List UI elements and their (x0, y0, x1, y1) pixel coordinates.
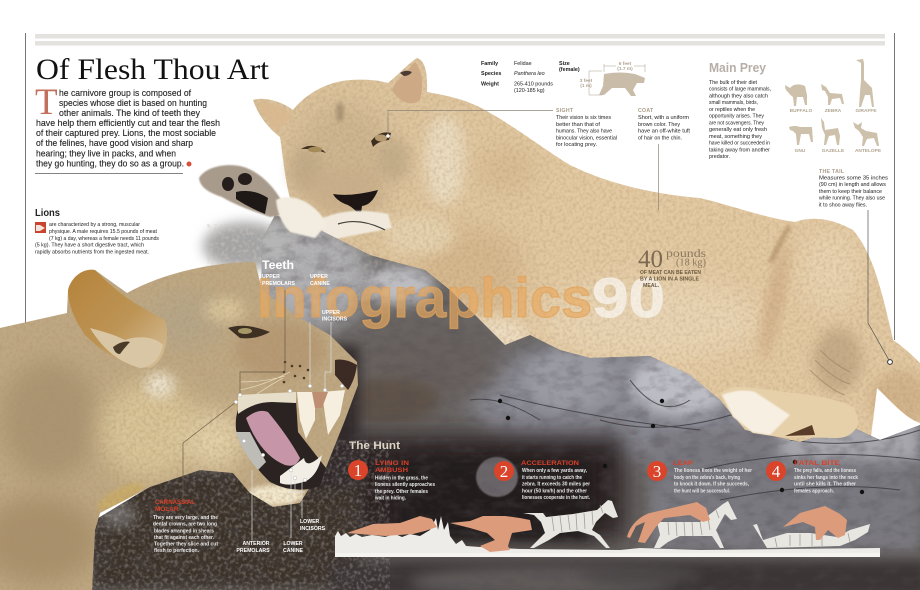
left paw of upper lioness (199, 165, 327, 238)
prey labels: GIRAFFE (855, 108, 877, 114)
hunt step 2: zebra. It exceeds 30 miles per (522, 482, 591, 488)
header bands and page rules (25, 33, 895, 340)
speckled rock fading behind paw (203, 222, 287, 270)
sight note: Their vision is six times (556, 115, 611, 121)
prey silhouettes (785, 59, 879, 146)
hunt step 3 (647, 460, 753, 494)
hunt illustration: fallen zebra and biting lioness (753, 506, 870, 548)
coat note: of hair on the chin. (638, 136, 682, 142)
hunt step 4: FATAL BITE (794, 460, 841, 467)
main prey text: are not scavengers. They (709, 120, 764, 126)
teeth labels: UPPER (262, 274, 280, 280)
coat note (638, 108, 691, 142)
front lioness photo (0, 260, 360, 590)
hunt illustration: zebra running (523, 500, 618, 548)
prey labels (790, 108, 882, 154)
fact table: (120-185 kg) (514, 88, 545, 94)
icon: gazelle (821, 118, 840, 145)
watermark: 90 (592, 266, 665, 329)
40 pounds statistic: pounds (666, 246, 706, 260)
fact table: Species (481, 71, 501, 77)
hunt step 1: Hidden in the grass, the (375, 476, 428, 482)
tooth labels lower: INCISORS (300, 526, 326, 532)
hunt illustration: lioness lying in ambush (347, 516, 437, 536)
main prey text: have killed or succeeded in (709, 141, 770, 147)
intro text block: other animals. The kind of teeth they (59, 108, 200, 119)
hunt step 2: ACCELERATION (521, 460, 579, 467)
main prey text (709, 60, 771, 160)
carnassial molar note: CARNASSIAL (155, 499, 195, 506)
fact table: 265-410 pounds (514, 82, 553, 88)
fact table: (female) (559, 67, 580, 73)
hunt illustration: lioness running (450, 516, 532, 552)
front lioness ear (68, 270, 167, 368)
carnassial molar note: that fit against each other. (154, 535, 214, 541)
hunt step 4: until she kills it. The other (794, 482, 857, 488)
size diagram: 3 feet (580, 78, 593, 84)
fact table: Panthera leo (514, 71, 545, 77)
hunt step 2: When only a few yards away, (522, 468, 587, 474)
fact table: Felidae (514, 61, 532, 67)
hunt step 1: wait in hiding. (374, 496, 406, 502)
coat note: COAT (638, 108, 654, 114)
sight note (556, 108, 617, 148)
main prey text: opportunity arises. They (709, 114, 764, 120)
sight note: binocular vision, essential (556, 136, 617, 142)
icon: buffalo (785, 84, 807, 106)
the hunt heading: The Hunt (349, 440, 400, 452)
teeth labels: CANINE (310, 281, 330, 287)
carnassial molar note: dental crowns, are two long (153, 522, 217, 528)
prey labels: ZEBRA (825, 108, 842, 114)
fact table: Family (481, 61, 498, 67)
tail note (818, 169, 888, 208)
main prey text: or reptiles when the (709, 107, 755, 113)
intro text block (35, 82, 220, 174)
lioness face features (258, 62, 422, 240)
40 pounds statistic: (18 kg) (676, 258, 706, 268)
hunt step 3: The lioness fixes the weight of her (674, 468, 753, 474)
teeth labels: UPPER (310, 274, 328, 280)
coat note: Short, with a uniform (638, 115, 690, 121)
Lions text block: Lions (35, 207, 60, 219)
hunt step 2 (494, 460, 591, 501)
main prey text: The bulk of their diet (709, 80, 757, 86)
hunt step 1: lioness silently approaches (375, 482, 435, 488)
intro text block: of the felines, have good vision and sharp (36, 138, 193, 149)
hunt step 3: to knock it down. If she succeeds, (674, 482, 749, 488)
sight and coat leader lines (386, 110, 892, 364)
icon: antelope (853, 122, 879, 146)
40 pounds statistic: BY A LION IN A SINGLE (640, 276, 700, 282)
40 pounds statistic: MEAL. (643, 283, 660, 289)
tail note: it to shoo away flies. (819, 202, 867, 208)
teeth labels (262, 260, 348, 322)
hunt illustration: zebra and leaping lioness (627, 501, 737, 548)
hunt step 3: LEAP (673, 460, 694, 467)
tooth labels lower: LOWER (283, 541, 303, 547)
hunt step 1 (348, 460, 435, 502)
sight note: humans. They also have (556, 128, 612, 134)
tail note: them to keep their balance (819, 189, 882, 195)
tail note: Measures some 35 inches (819, 176, 888, 182)
hunt step 2: it starts running to catch the (522, 475, 582, 481)
size diagram: (1 m) (580, 83, 592, 89)
main prey text: taking away from another (709, 147, 770, 153)
sight note: SIGHT (556, 108, 574, 114)
sight note: for locating prey. (556, 142, 597, 148)
hunt step 2: 2 (500, 462, 508, 481)
tail note: while running. They also use (818, 196, 885, 202)
prey labels: BUFFALO (790, 108, 813, 114)
prey labels: ANTELOPE (855, 148, 882, 154)
hunt step 1: AMBUSH (375, 467, 408, 474)
tooth labels lower: LOWER (300, 519, 320, 525)
upper lioness photo (250, 55, 920, 445)
icon: gnu (789, 126, 813, 145)
teeth labels: Teeth (262, 260, 294, 272)
Lions text block: (5 kg). They have a short digestive tract, which (35, 242, 144, 248)
Lions text block: are characterized by a strong, muscular (49, 222, 140, 228)
hunt step 1: 1 (354, 461, 362, 480)
Lions text block: rapidly absorbs nutrients from the ingested meat. (35, 250, 149, 256)
drop cap: T (35, 82, 58, 123)
intro text block: have help them efficiently cut and tear the flesh (36, 118, 220, 129)
size diagram: (1.7 m) (617, 66, 633, 72)
main prey text: consists of large mammals, (709, 87, 771, 93)
teeth labels: INCISORS (322, 316, 348, 322)
sight note: better than that of (556, 122, 601, 128)
intro text block: they go hunting, they do so as a group. (36, 158, 184, 170)
tooth labels lower (236, 519, 326, 554)
size diagram (580, 61, 645, 96)
fact table: Weight (481, 82, 499, 88)
hunt step 2: hour (50 km/h) and the other (522, 488, 588, 494)
hunt step 3: 3 (653, 462, 661, 481)
main prey text: generally eat only fresh (709, 127, 767, 133)
40 pounds statistic (638, 246, 706, 289)
tail note: THE TAIL (819, 169, 845, 175)
40 pounds statistic: OF MEAT CAN BE EATEN (640, 270, 701, 276)
intro text block: of their captured prey. Lions, the most sociable (36, 128, 216, 139)
hunt step 4: The prey falls, and the lioness (794, 468, 856, 474)
main prey text: predator. (709, 154, 730, 160)
carnassial molar note: flesh to perfection. (154, 548, 199, 554)
fact table (481, 61, 580, 94)
intro text block: hearing; they live in packs, and when (36, 148, 176, 160)
coat note: have an off-white tuft (638, 128, 691, 134)
main prey text: meat, something they (709, 134, 762, 140)
carnassial molar note: Together they slice and cut (154, 542, 218, 548)
main prey text: small mammals, birds, (709, 100, 758, 106)
Lions text block (35, 207, 159, 256)
hunt step 4 (766, 460, 858, 494)
size diagram: 6 feet (619, 61, 632, 67)
icon: zebra (821, 84, 844, 105)
front lioness open mouth (236, 390, 345, 490)
main prey text: Main Prey (709, 60, 767, 75)
40 pounds statistic: 40 (638, 246, 663, 273)
front lioness snout (228, 326, 357, 400)
hunt step 2: lionesses cooperate in the hunt. (522, 495, 590, 501)
carnassial molar note: MOLAR (155, 506, 179, 513)
tail note: (90 cm) in length and allows (819, 182, 886, 188)
teeth labels: UPPER (322, 310, 340, 316)
fact table: Size (559, 61, 570, 67)
hunt step 4: 4 (772, 462, 781, 481)
intro text block: species whose diet is based on hunting (59, 98, 207, 109)
icon: giraffe (856, 59, 874, 107)
coat note: brown color. They (638, 122, 680, 128)
tooth labels lower: CANINE (283, 548, 303, 554)
hunt step 1: LYING IN (375, 460, 409, 467)
carnassial molar note: They are very large, and the (153, 515, 218, 521)
carnassial molar note (153, 499, 218, 554)
tooth labels lower: PREMOLARS (236, 548, 270, 554)
carnassial molar note: blades arranged in shears (154, 528, 214, 534)
hunt step 1: the prey. Other females (375, 489, 428, 495)
teeth labels: PREMOLARS (262, 281, 296, 287)
main prey text: although they also catch (709, 94, 768, 100)
callout lines for teeth (183, 290, 344, 540)
tooth labels lower: ANTERIOR (242, 541, 270, 547)
hunt step 3: the hunt will be successful. (674, 488, 730, 494)
rock (90, 210, 920, 590)
icon: red arrow (35, 222, 46, 233)
hunt illustration: grass band (335, 516, 880, 558)
title: Of Flesh Thou Art (36, 53, 270, 86)
hunt step 4: sinks her fangs into the neck (794, 475, 858, 481)
Lions text block: physique. A male requires 15.5 pounds of meat (49, 229, 157, 235)
prey labels: GAZELLE (822, 148, 845, 154)
right forepaw of upper lioness (720, 387, 858, 438)
Lions text block: (7 kg) a day, whereas a female needs 11 pounds (49, 236, 159, 242)
hunt step 3: body on the zebra's back, trying (674, 475, 740, 481)
hunt step 4: females approach. (794, 488, 834, 494)
intro text block: he carnivore group is composed of (59, 88, 191, 99)
prey labels: GNU (795, 148, 806, 154)
watermark: Infographics (257, 266, 592, 329)
